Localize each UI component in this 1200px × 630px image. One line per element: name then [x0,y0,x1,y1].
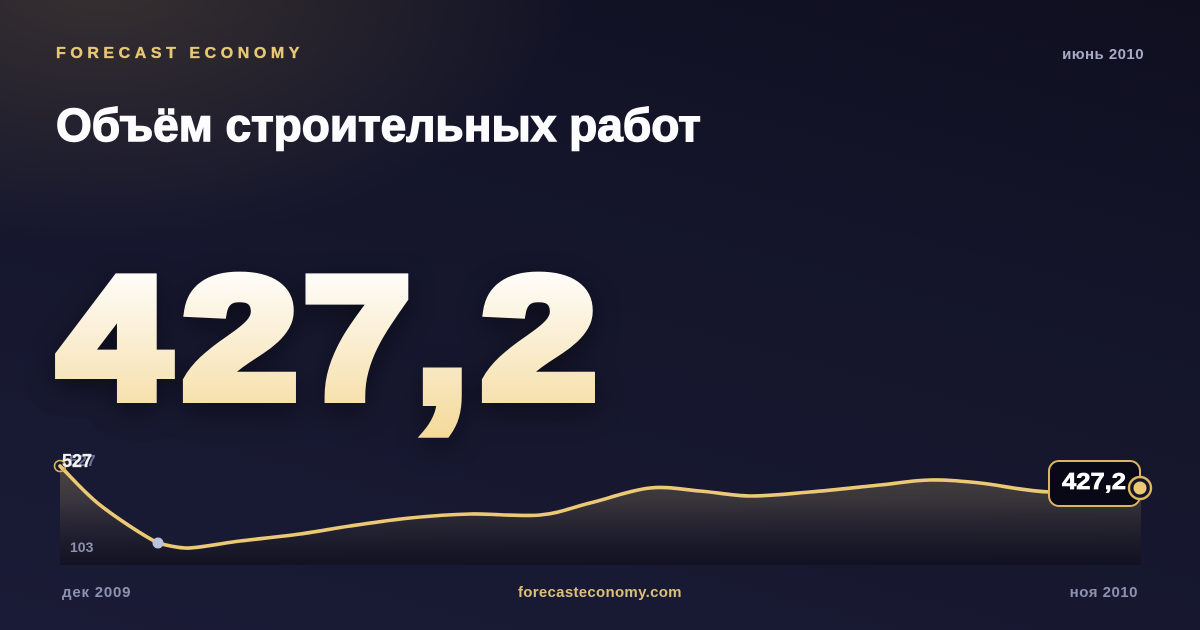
date label: июнь 2010 [1062,46,1144,63]
minimum point [152,538,164,548]
muted maximum label: 527 [69,453,96,470]
big value: 7 [304,243,410,434]
start marker [54,460,66,472]
end date: ноя 2010 [1070,584,1138,601]
end marker [1129,477,1151,499]
value callout: 427,2 [1062,468,1126,494]
big value: , [412,217,472,446]
big value: 4 [59,243,169,434]
brand label: FORECAST ECONOMY [56,45,304,62]
big value: 2 [482,243,596,434]
start date: дек 2009 [62,584,131,601]
minimum label: 103 [70,539,94,555]
value callout [1049,461,1140,506]
website: forecasteconomy.com [518,584,682,601]
area fill [60,466,1141,565]
big value: 2 [183,243,297,434]
maximum label: 527 [62,451,92,471]
title: Объём строительных работ [56,99,701,151]
trend line [60,466,1141,548]
